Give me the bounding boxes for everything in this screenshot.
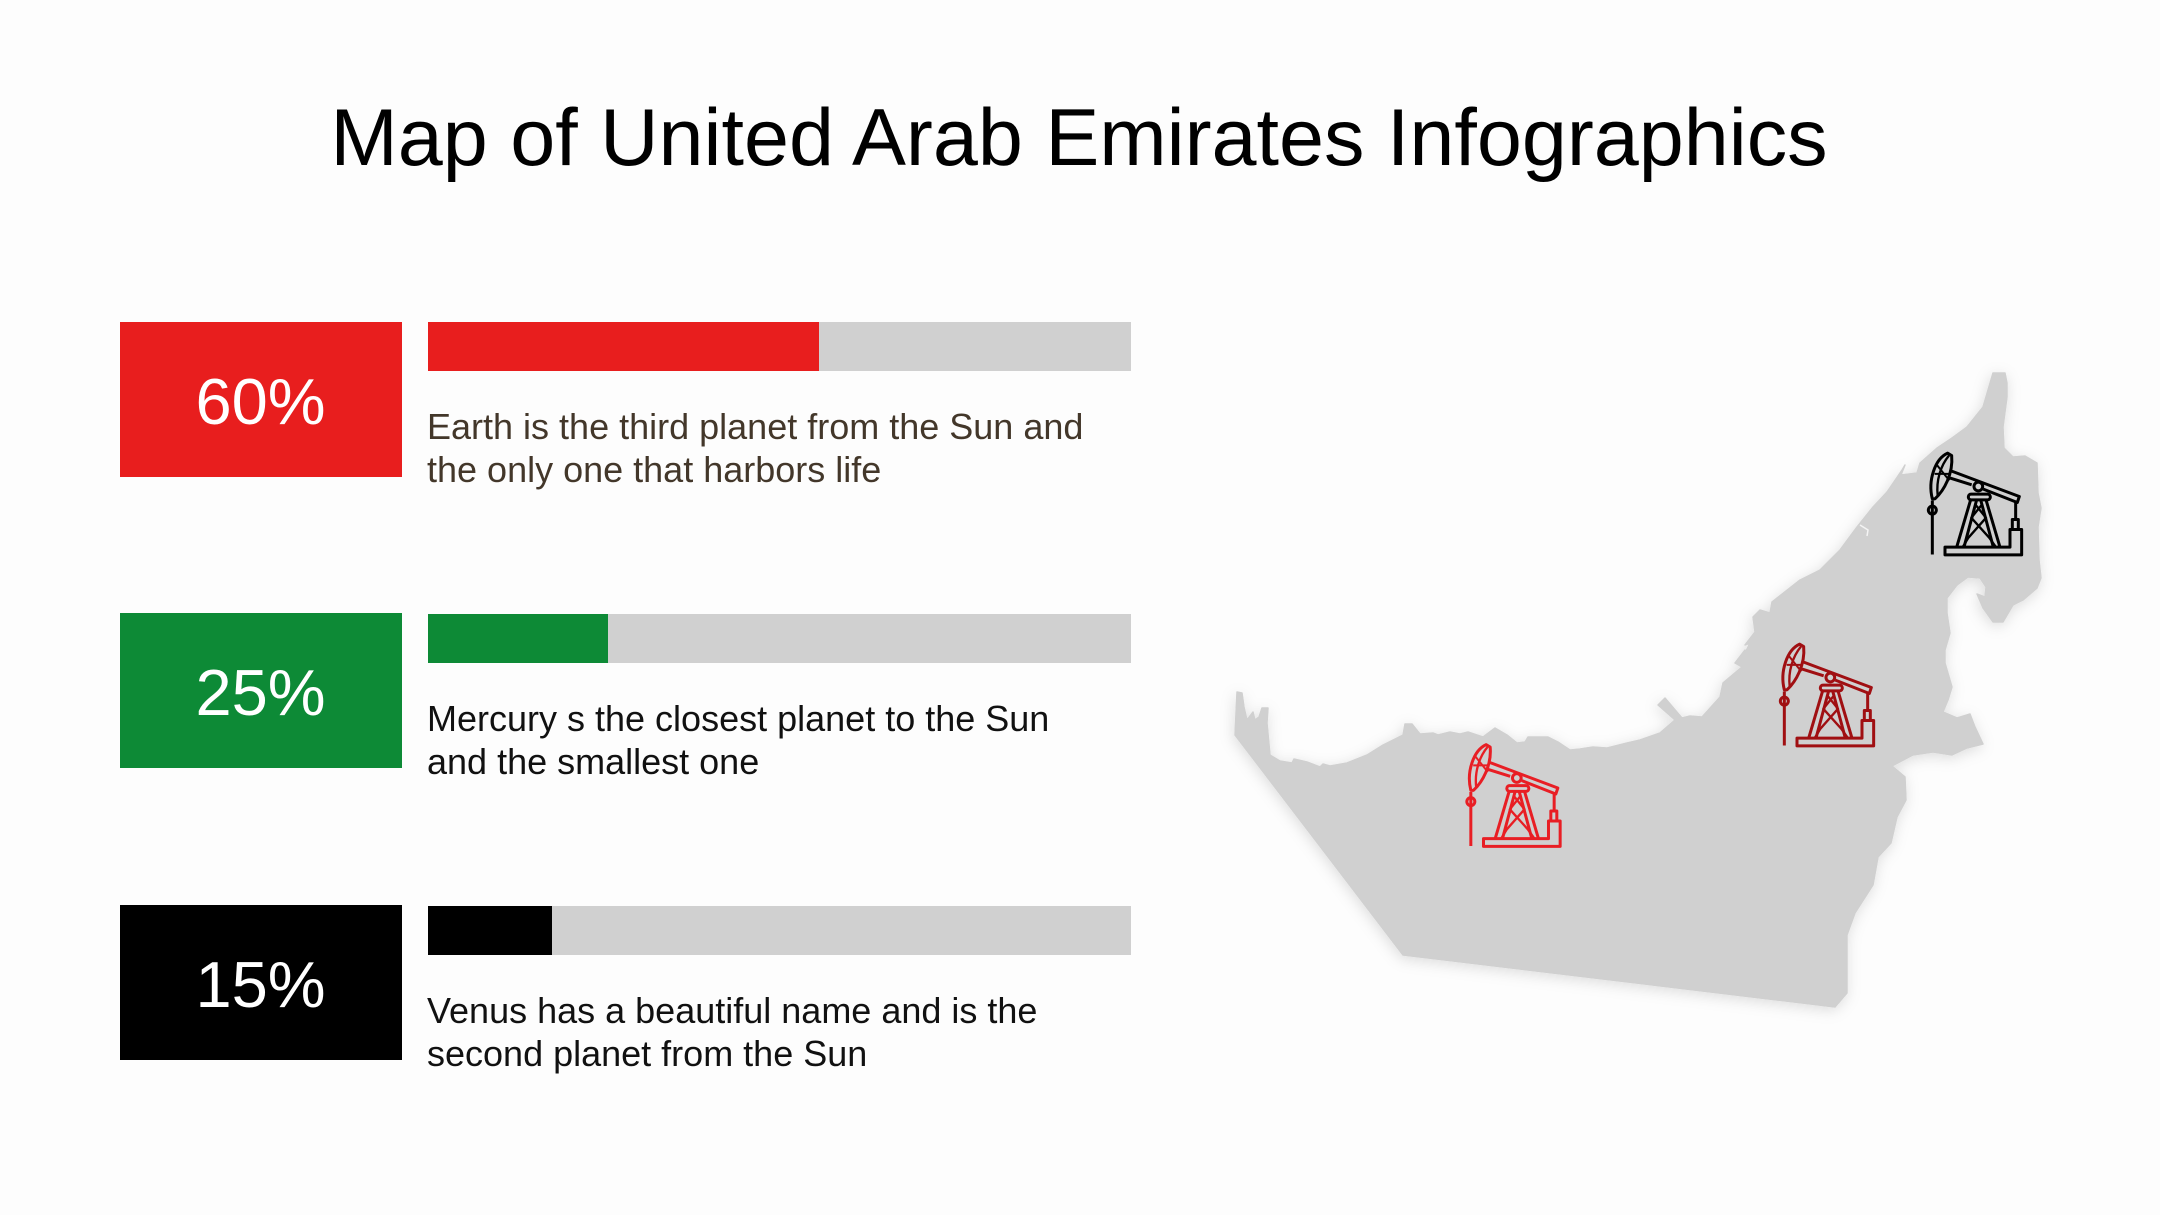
description: Mercury: Mercury s the closest planet to the Sun [427,698,1049,739]
icon: red oil pump [1467,745,1560,846]
description: Venus [427,990,1037,1074]
stat box: 25%: 25% [195,656,326,729]
progress bar: 25% [428,614,1131,663]
description: Venus: Venus has a beautiful name and is the [427,990,1037,1031]
icon: black oil pump [1928,453,2022,555]
title: Map of United Arab Emirates Infographics [330,93,1828,183]
panel: 60% row [120,322,1131,490]
description: Mercury [427,698,1049,782]
UAE map silhouette [1235,373,2041,1007]
description: Earth [427,406,1083,490]
progress bar: 15% [428,906,1131,955]
stat box: 25% [120,613,402,768]
icon: dark red oil pump [1780,644,1874,746]
progress bar: 60% [428,322,1131,371]
panel: 25% row [120,613,1131,782]
description: Venus: second planet from the Sun [427,1033,867,1074]
stat box: 60% [120,322,402,477]
description: Earth: the only one that harbors life [427,449,881,490]
stat box: 15%: 15% [195,948,326,1021]
description: Mercury: and the smallest one [427,741,759,782]
panel: 15% row [120,905,1131,1074]
description: Earth: Earth is the third planet from the Sun and [427,406,1083,447]
stat box: 60%: 60% [195,365,326,438]
stat box: 15% [120,905,402,1060]
